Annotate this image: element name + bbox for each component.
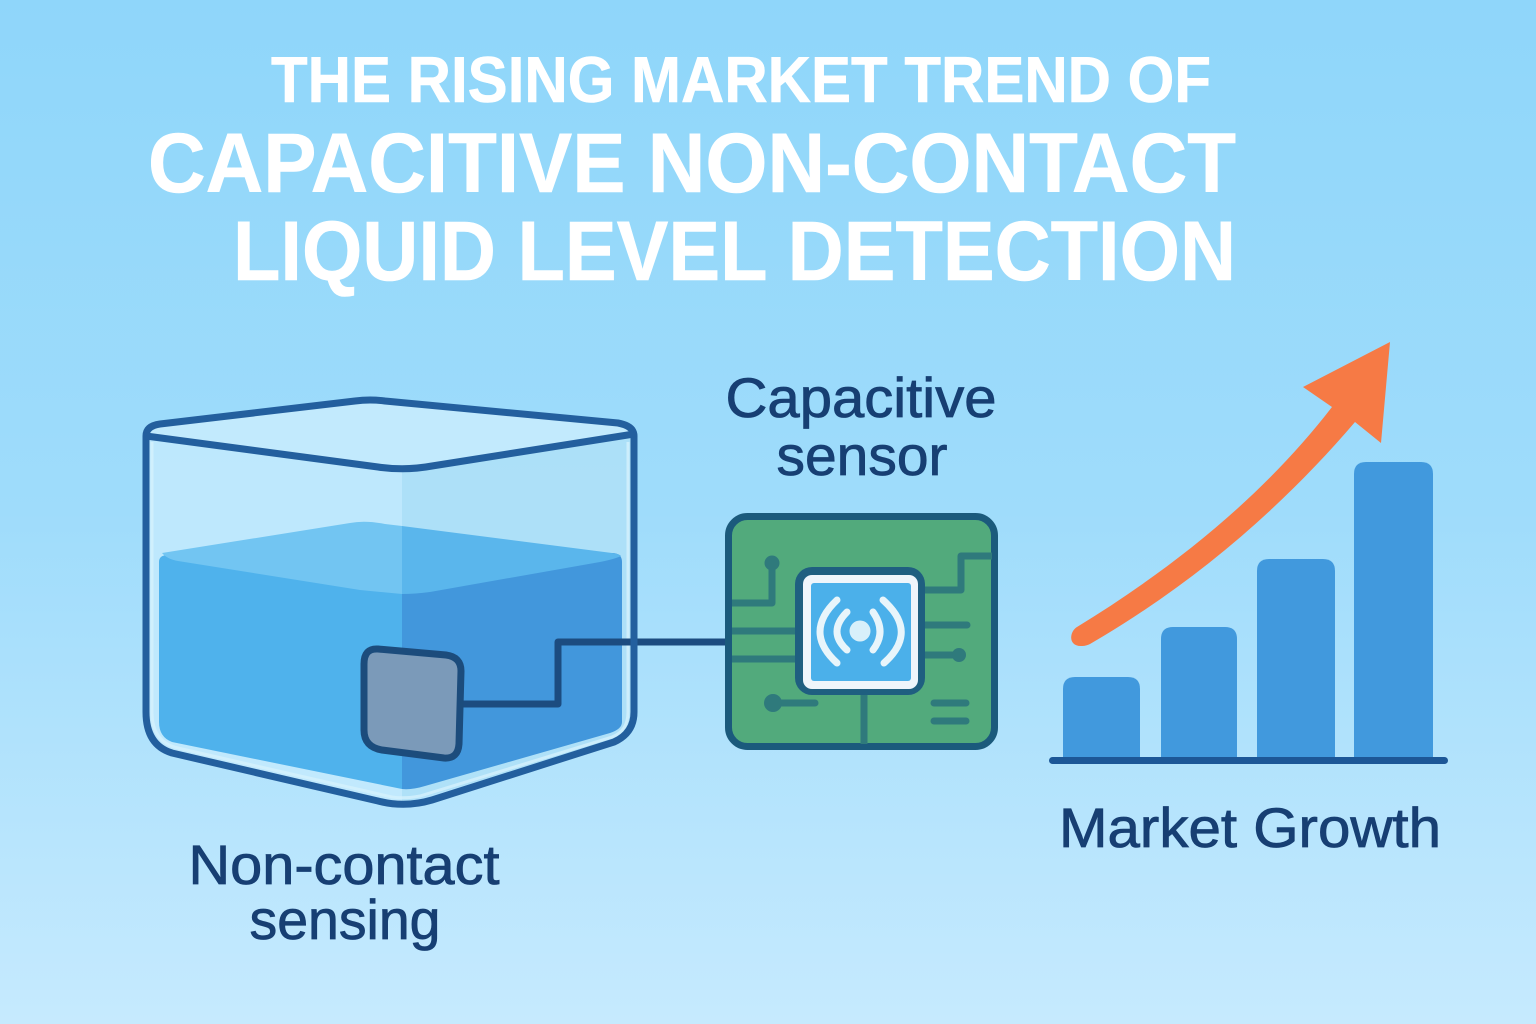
tank inner highlight (152, 442, 628, 798)
board traces (732, 556, 992, 744)
tank glass right face (402, 436, 634, 803)
water surface (162, 522, 402, 594)
tank rim front edge (146, 434, 634, 469)
axis (1049, 757, 1448, 764)
tank opening (146, 400, 634, 471)
tank glass left face (146, 436, 402, 803)
bar 3 (1257, 559, 1335, 758)
title: LIQUID LEVEL DETECTION (233, 204, 1236, 298)
label: capacitive sensor (726, 366, 996, 487)
sensor pad (364, 649, 461, 758)
board (728, 516, 994, 746)
bar 1 (1063, 677, 1140, 758)
title (148, 43, 1236, 298)
label: non-contact sensing: Non-contact (188, 833, 500, 896)
wire from sensor to board (462, 642, 726, 704)
icon: liquid tank with sensor (146, 400, 726, 804)
label: non-contact sensing (188, 833, 500, 951)
label: capacitive sensor: Capacitive (726, 366, 996, 429)
arrow: growth trend (1071, 342, 1390, 646)
title: CAPACITIVE NON-CONTACT (148, 116, 1236, 210)
water front left (159, 555, 402, 789)
icon: circuit board (728, 516, 994, 746)
label: market growth: Market Growth (1059, 796, 1441, 859)
bar 4 (1354, 462, 1433, 758)
bar chart: market growth (1049, 462, 1448, 764)
signal icon (820, 600, 901, 663)
bar 2 (1161, 627, 1237, 758)
water front right (402, 553, 622, 789)
label: capacitive sensor: sensor (776, 424, 948, 487)
sensor chip (795, 567, 925, 695)
tank outline (146, 400, 634, 804)
title: THE RISING MARKET TREND OF (271, 43, 1211, 116)
label: non-contact sensing: sensing (250, 888, 440, 951)
